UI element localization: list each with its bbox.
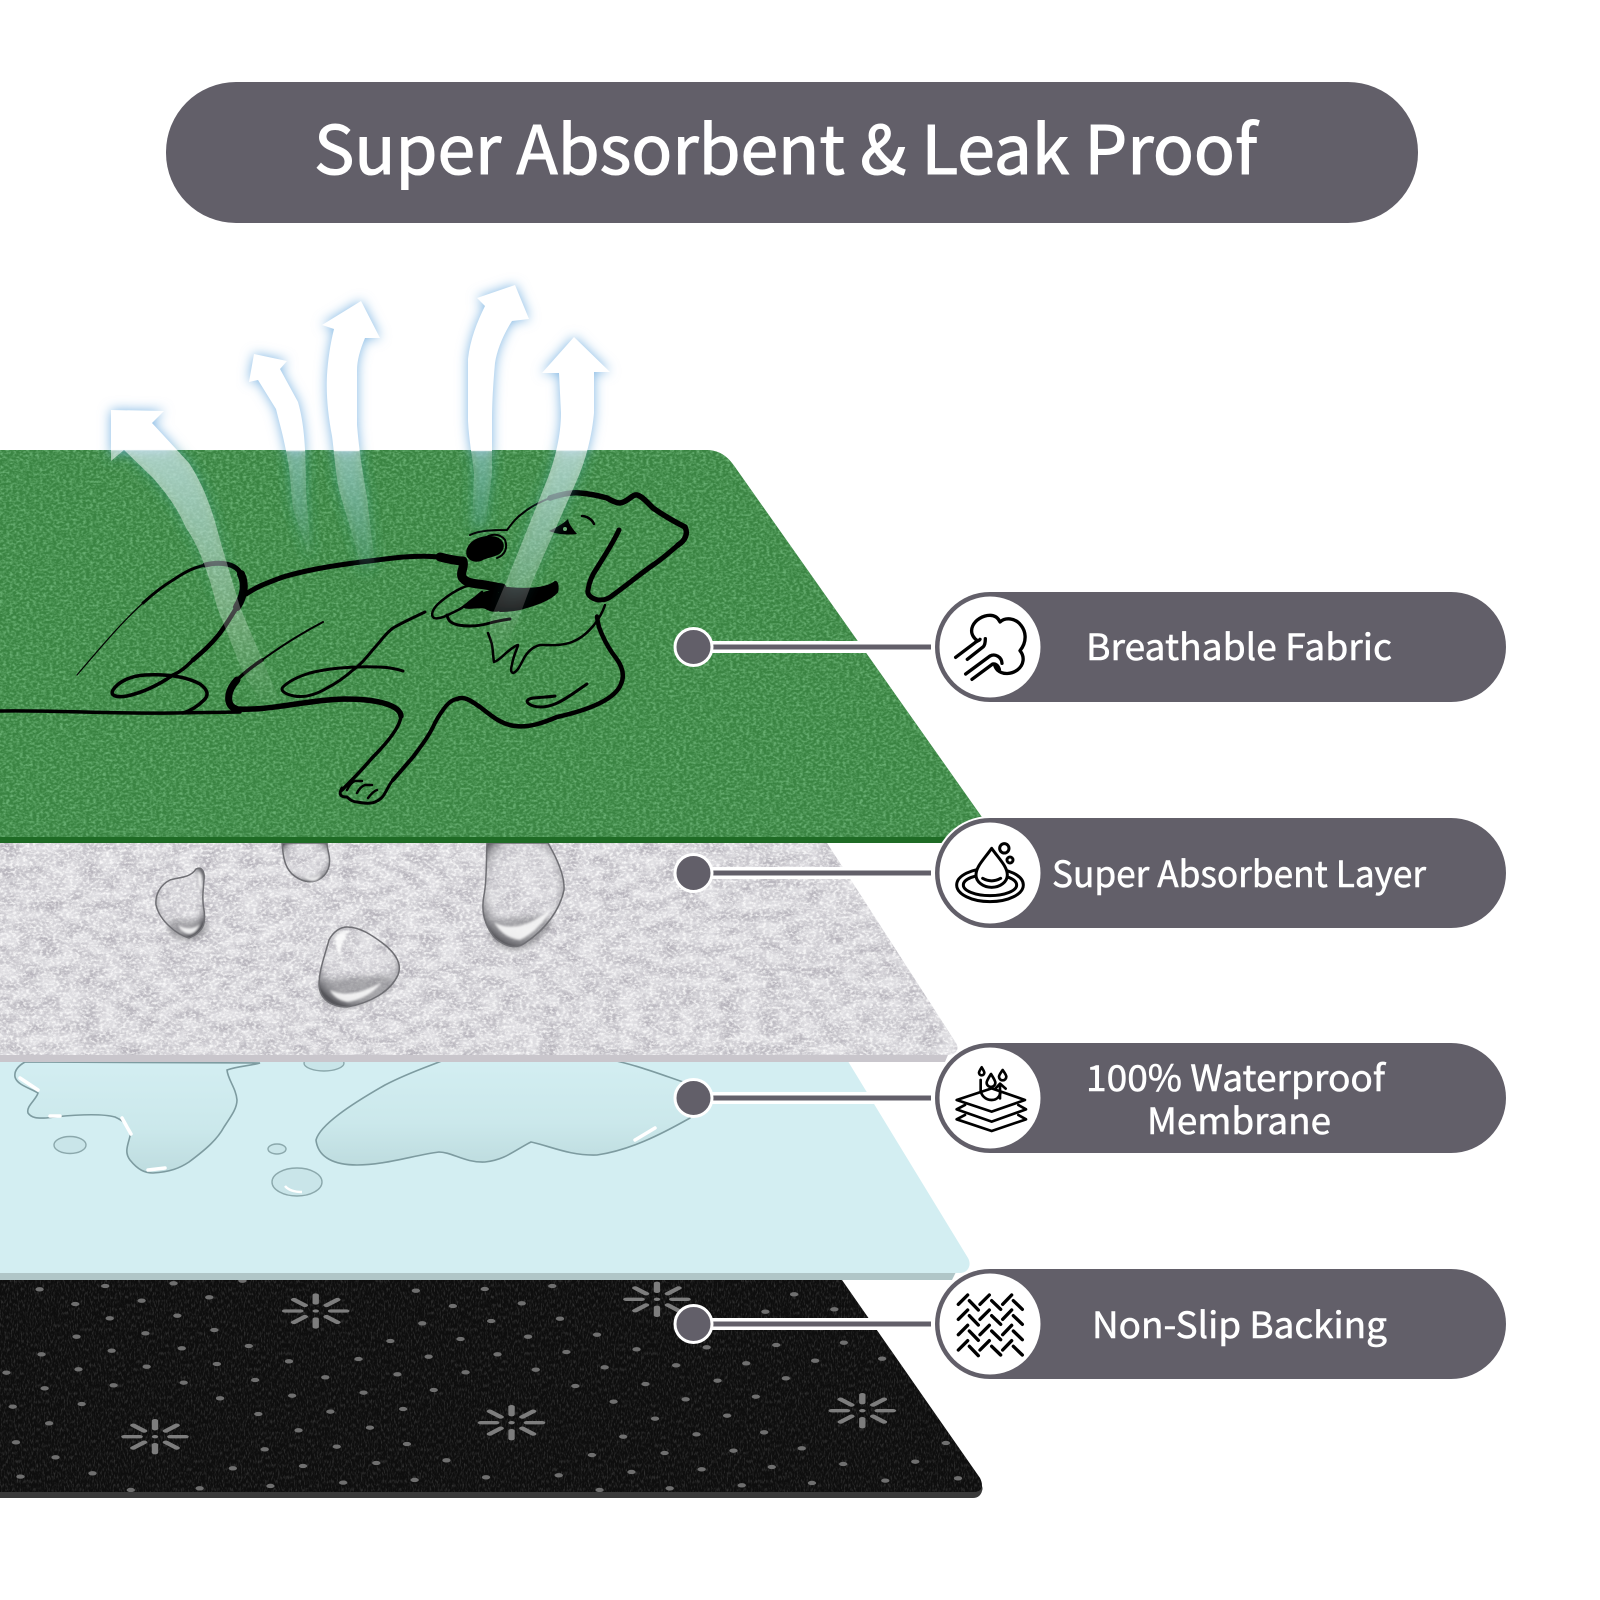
lower jaw bbox=[447, 615, 510, 626]
layer: black non-slip backing bbox=[0, 1280, 990, 1498]
back line bbox=[246, 556, 440, 594]
arrow 2 bbox=[249, 354, 311, 558]
icon: layered membrane with drops bbox=[957, 1067, 1026, 1131]
connector: waterproof membrane bbox=[675, 1080, 932, 1116]
eye bbox=[549, 519, 577, 535]
title banner bbox=[166, 82, 1418, 223]
label pill: non-slip backing: Non-Slip Backing bbox=[1092, 1297, 1387, 1349]
haunch and tail bbox=[77, 603, 143, 675]
connector: breathable fabric bbox=[675, 628, 932, 666]
water drops on fleece bbox=[156, 843, 564, 1007]
water puddle right bbox=[316, 1060, 690, 1165]
ground line bbox=[0, 711, 240, 713]
front leg bbox=[342, 716, 401, 790]
paw bbox=[340, 780, 393, 803]
arrow 1 bbox=[111, 410, 280, 705]
label pill: breathable fabric bbox=[933, 590, 1508, 704]
layer: teal waterproof membrane bbox=[0, 1055, 970, 1280]
arrow glow bbox=[111, 285, 610, 705]
neck ruffle bbox=[488, 605, 605, 673]
label pill: super absorbent layer: Super Absorbent Layer bbox=[1052, 846, 1427, 898]
icon: herringbone grip bbox=[958, 1295, 1022, 1356]
drop highlights bbox=[178, 872, 552, 1002]
head top bbox=[470, 498, 550, 535]
ear bbox=[588, 530, 678, 600]
layer: grey super absorbent fleece bbox=[0, 843, 970, 1062]
elbow bbox=[527, 684, 587, 707]
belly loop bbox=[282, 612, 425, 697]
label pill: waterproof membrane: Membrane bbox=[1147, 1093, 1331, 1145]
nose bbox=[467, 537, 503, 561]
layer: green breathable fabric bbox=[0, 450, 1000, 844]
tongue bbox=[432, 585, 482, 618]
label pill: waterproof membrane: 100% Waterproof bbox=[1086, 1050, 1386, 1102]
icon: breath cloud bbox=[956, 615, 1025, 679]
arrow 5 bbox=[490, 337, 610, 650]
water puddle left bbox=[15, 1062, 260, 1173]
non-slip grip dots bbox=[6, 1281, 958, 1490]
muzzle and lip bbox=[440, 557, 502, 588]
arrow 4 bbox=[468, 285, 529, 528]
dog line drawing bbox=[0, 493, 686, 803]
puddle highlights bbox=[20, 1078, 655, 1170]
label pill: breathable fabric: Breathable Fabric bbox=[1086, 619, 1392, 671]
connector: super absorbent layer bbox=[675, 854, 932, 892]
label pill: waterproof membrane bbox=[933, 1041, 1508, 1155]
label pill: super absorbent layer bbox=[933, 816, 1508, 930]
water drop shadows bbox=[168, 915, 551, 1007]
small water beads bbox=[54, 1055, 344, 1196]
connector: non-slip backing bbox=[675, 1306, 932, 1342]
title banner: Super Absorbent & Leak Proof bbox=[314, 97, 1259, 194]
label pill: non-slip backing bbox=[933, 1267, 1508, 1381]
icon: absorbed water drop bbox=[957, 844, 1023, 902]
open mouth bbox=[500, 582, 558, 611]
air flow arrows bbox=[111, 285, 610, 705]
hind leg bbox=[262, 622, 323, 660]
chest bottom bbox=[457, 617, 623, 726]
arrow 3 bbox=[322, 301, 380, 574]
